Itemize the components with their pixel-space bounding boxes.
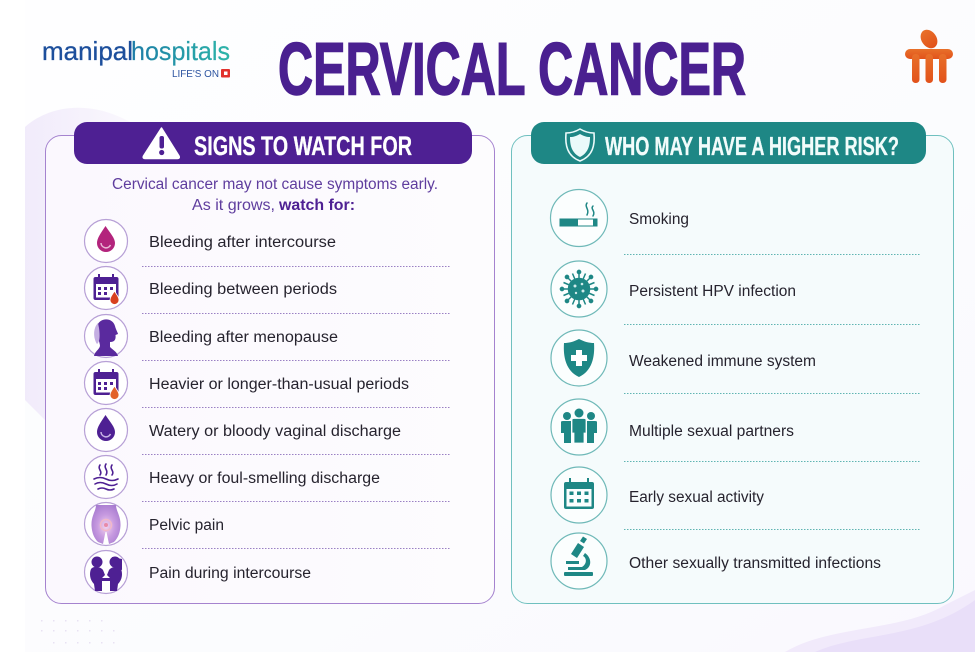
item: bleeding after menopause bbox=[84, 314, 338, 358]
item: pain during intercourse bbox=[84, 550, 311, 594]
item: early sexual activity: Early sexual activity bbox=[629, 489, 764, 506]
item: pelvic pain bbox=[84, 502, 224, 546]
item: bleeding between periods: Bleeding between periods bbox=[149, 281, 337, 298]
item: pelvic pain: Pelvic pain bbox=[149, 517, 224, 534]
item: heavier or longer periods: Heavier or longer-than-usual periods bbox=[149, 376, 409, 393]
heading: signs to watch for: SIGNS TO WATCH FOR bbox=[194, 131, 412, 161]
intro text bbox=[112, 176, 438, 214]
item: smoking bbox=[550, 190, 689, 246]
item: bleeding after intercourse bbox=[84, 220, 336, 262]
logo: manipal hospitals: LIFE'S ON bbox=[172, 69, 219, 80]
item: watery or bloody discharge bbox=[84, 408, 401, 452]
intro text: Cervical cancer may not cause symptoms early. bbox=[112, 176, 438, 193]
heading: signs to watch for bbox=[74, 122, 472, 164]
item: multiple sexual partners: Multiple sexual partners bbox=[629, 423, 794, 440]
logo: manipal hospitals: manipal bbox=[42, 36, 133, 66]
panel: signs to watch for bbox=[46, 122, 494, 604]
icon: warning triangle bbox=[143, 128, 179, 158]
item: smoking: Smoking bbox=[629, 211, 689, 228]
item: bleeding between periods bbox=[84, 266, 337, 310]
item: heavier or longer periods bbox=[84, 362, 409, 404]
item: pain during intercourse: Pain during intercourse bbox=[149, 565, 311, 582]
item: persistent hpv infection bbox=[551, 261, 796, 317]
item: watery or bloody discharge: Watery or bloody vaginal discharge bbox=[149, 423, 401, 440]
icon: orange brand mark bbox=[905, 27, 953, 83]
logo: manipal hospitals bbox=[42, 36, 230, 80]
heading: who may have a higher risk bbox=[531, 122, 926, 164]
panel: who may have a higher risk bbox=[512, 122, 954, 604]
item: bleeding after intercourse: Bleeding after intercourse bbox=[149, 234, 336, 251]
item: weakened immune system bbox=[551, 330, 816, 386]
intro text: watch for: bbox=[278, 197, 355, 214]
icon: shield outline bbox=[566, 129, 594, 161]
item: persistent hpv infection: Persistent HPV infection bbox=[629, 283, 796, 300]
item: heavy or foul-smelling discharge bbox=[84, 456, 380, 498]
item: weakened immune system: Weakened immune system bbox=[629, 353, 816, 370]
item: other sexually transmitted infections: Other sexually transmitted infections bbox=[629, 555, 881, 572]
item: heavy or foul-smelling discharge: Heavy or foul-smelling discharge bbox=[149, 470, 380, 487]
intro text: As it grows, bbox=[192, 197, 275, 214]
item: other sexually transmitted infections bbox=[551, 533, 881, 589]
item: early sexual activity bbox=[551, 467, 764, 523]
item: multiple sexual partners bbox=[551, 399, 794, 455]
logo: manipal hospitals: hospitals bbox=[131, 36, 230, 66]
item: bleeding after menopause: Bleeding after menopause bbox=[149, 329, 338, 346]
title: CERVICAL CANCER bbox=[278, 28, 746, 110]
